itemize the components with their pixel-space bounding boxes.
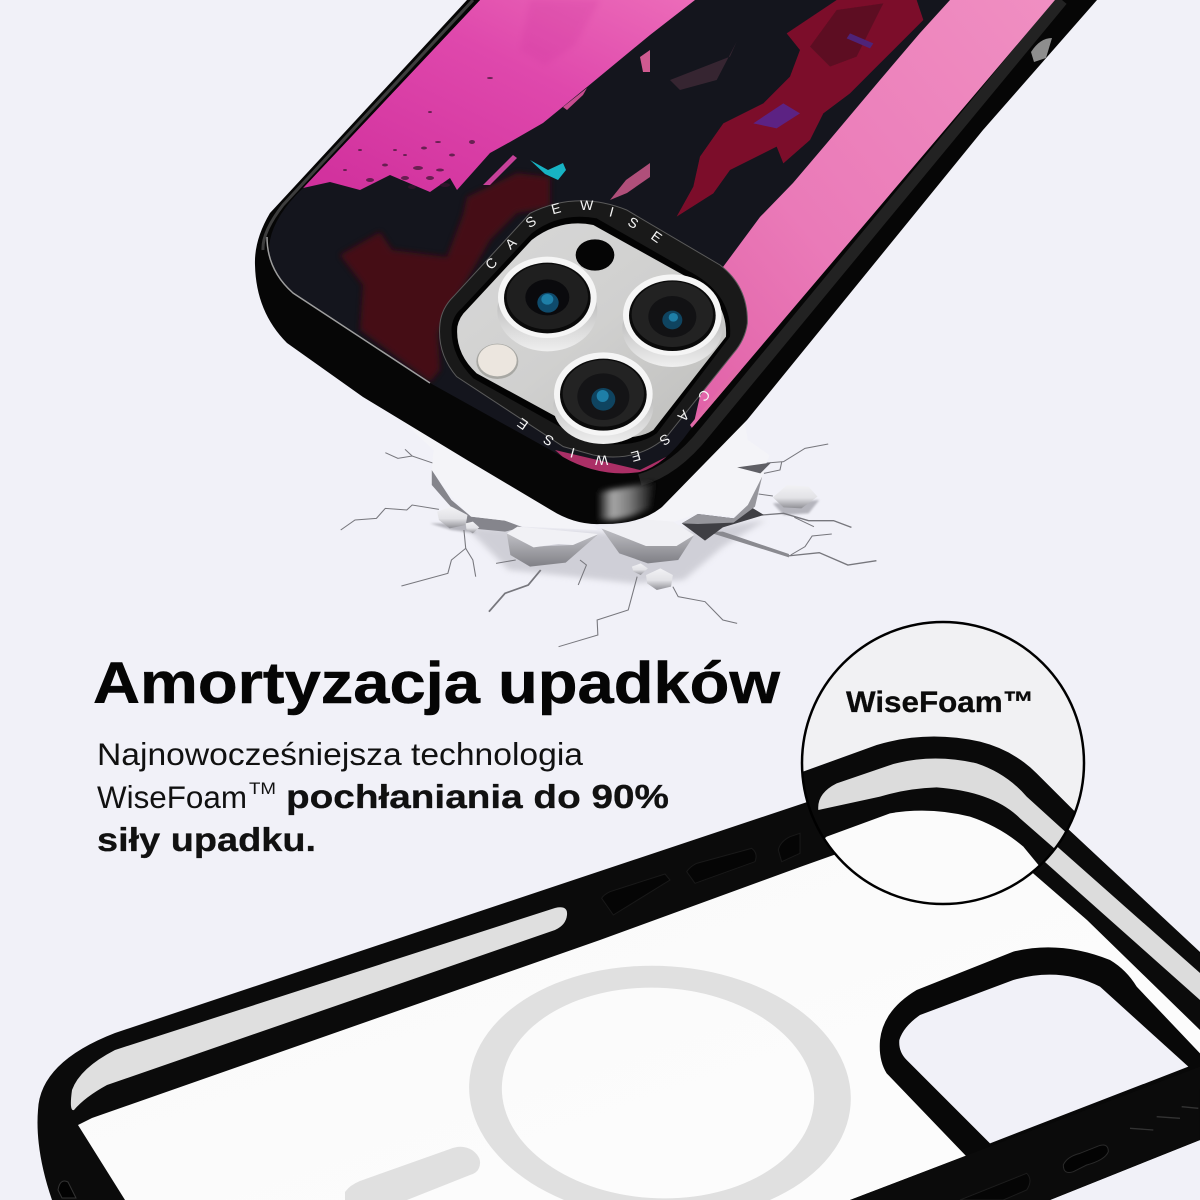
slab: left side wall xyxy=(432,470,523,532)
brand text xyxy=(482,197,714,469)
foam strip right xyxy=(1000,796,1200,1000)
alignment pill xyxy=(345,1147,480,1200)
brand text: W xyxy=(594,453,608,469)
clear back panel xyxy=(78,810,1200,1200)
body text: pochłaniania do 90% xyxy=(286,778,669,815)
side button highlight xyxy=(1031,38,1052,62)
body text: WiseFoam xyxy=(97,779,247,815)
WiseFoam callout xyxy=(800,620,1086,906)
lens bottom xyxy=(553,352,653,444)
brand text: C xyxy=(695,387,714,405)
slab: center left xyxy=(507,533,599,567)
case artwork xyxy=(260,0,1080,490)
case frame xyxy=(38,745,1200,1200)
camera cutout xyxy=(850,947,1200,1200)
brand text: A xyxy=(674,407,693,425)
lens right xyxy=(622,274,722,367)
body text: Najnowocześniejsza technologia xyxy=(97,736,584,772)
brand text: E xyxy=(629,447,642,465)
art: red brush left xyxy=(340,50,650,382)
bottom wall port xyxy=(1063,1145,1108,1172)
brand text: A xyxy=(502,234,520,252)
phone bumper xyxy=(255,0,1097,524)
left port xyxy=(58,1181,76,1198)
stones xyxy=(437,507,467,528)
top phone in case xyxy=(255,0,1097,524)
slab: center right xyxy=(601,528,694,563)
art: right pink xyxy=(690,0,1060,440)
brand text: S xyxy=(540,431,556,450)
camera module xyxy=(440,197,747,469)
brand text: E xyxy=(549,199,563,217)
lower case wall xyxy=(850,1067,1200,1200)
camera plate xyxy=(457,223,726,438)
brand text: I xyxy=(608,203,616,220)
bottom wall reflections xyxy=(1130,1107,1198,1130)
charging ring xyxy=(469,966,851,1200)
side buttons xyxy=(602,833,800,915)
body text: TM xyxy=(249,779,276,798)
brand text: W xyxy=(580,197,594,213)
callout ring xyxy=(802,622,1084,904)
bottom wall button xyxy=(960,1173,1030,1200)
cracked surface impact xyxy=(341,420,876,647)
bottom clear case xyxy=(38,745,1200,1200)
lens top left xyxy=(497,257,597,351)
flash xyxy=(476,344,518,379)
body text xyxy=(97,736,669,858)
body text: siły upadku. xyxy=(97,821,316,858)
art: paint speckles xyxy=(343,77,493,189)
art: red brush main xyxy=(670,0,923,217)
brand text: I xyxy=(568,445,576,461)
brand text: E xyxy=(648,227,665,246)
brand text: S xyxy=(522,212,539,231)
callout fill xyxy=(802,622,1084,904)
brand text: S xyxy=(657,431,673,449)
brand text: S xyxy=(625,213,641,232)
art edge highlight xyxy=(267,237,430,383)
slab: right gap xyxy=(682,507,764,541)
camera ring xyxy=(440,201,747,457)
foam strip left xyxy=(71,907,567,1110)
slab: right top xyxy=(644,420,769,522)
slab: left top xyxy=(401,420,598,530)
callout label: WiseFoam™ xyxy=(846,686,1034,719)
art: left pink xyxy=(303,0,695,192)
bumper corner highlight xyxy=(598,482,655,520)
heading: Amortyzacja upadków xyxy=(93,651,781,716)
art: cyan fleck xyxy=(530,160,566,180)
brand text: C xyxy=(482,254,500,273)
magnified frame xyxy=(804,736,1074,902)
art: speckled bottom sliver xyxy=(555,396,719,474)
camera hole xyxy=(576,239,614,271)
brand text: E xyxy=(514,415,531,433)
